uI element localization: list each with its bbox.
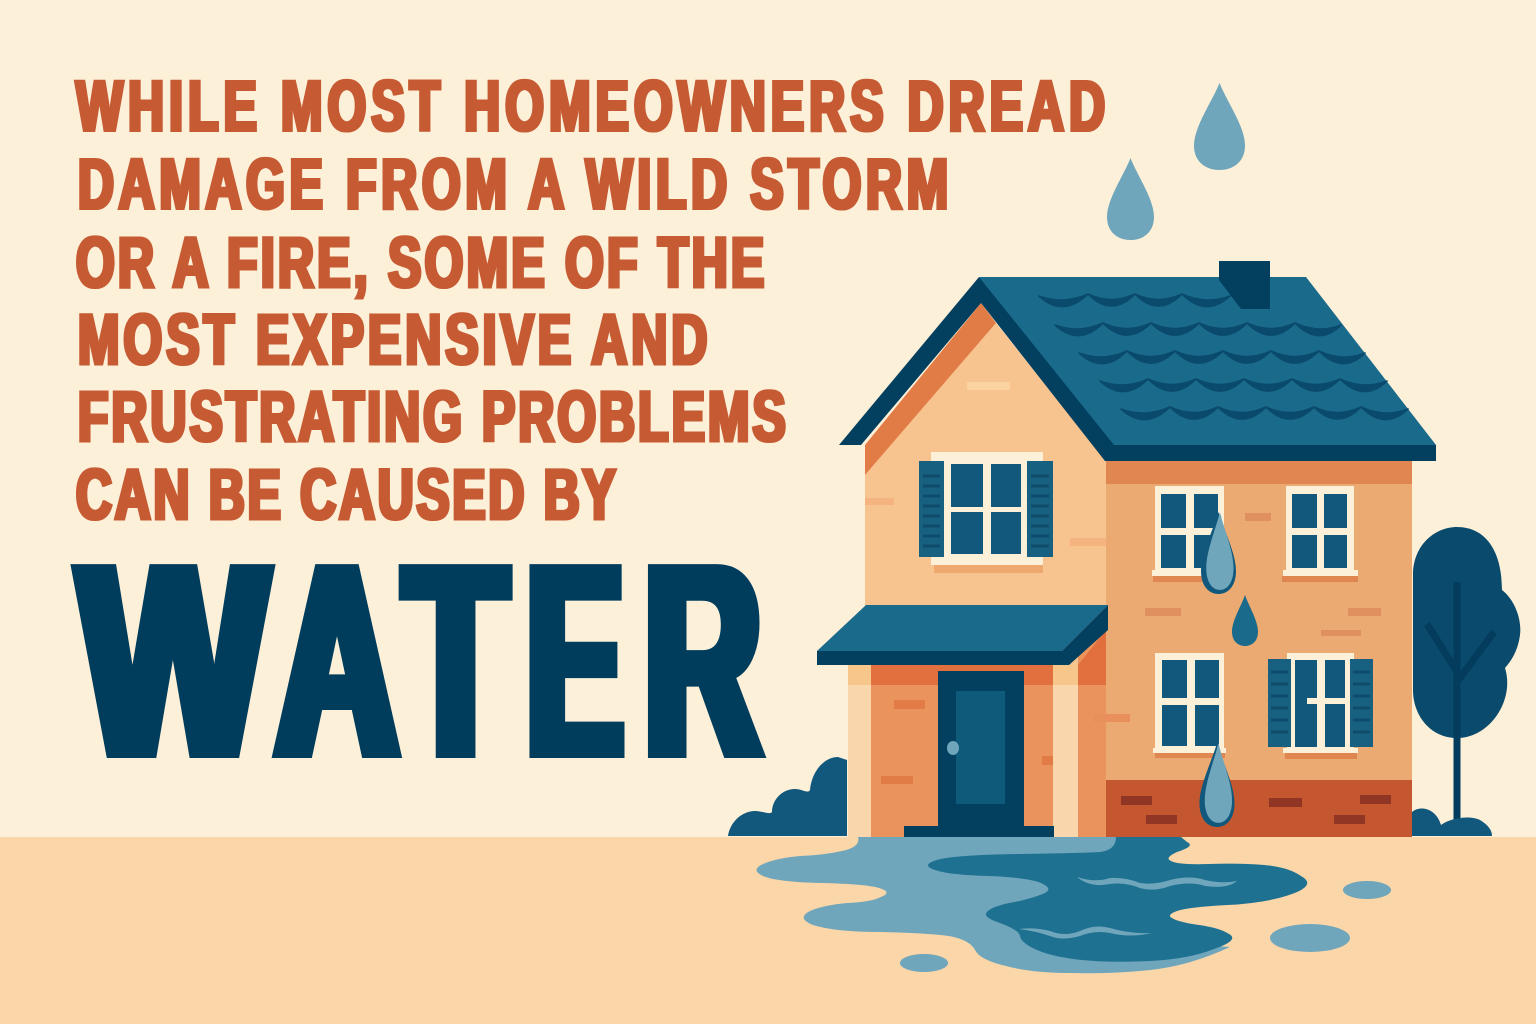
house bbox=[817, 261, 1436, 837]
roof gable orange trim bbox=[865, 303, 996, 475]
heading text: WHILE MOST HOMEOWNERS DREAD bbox=[76, 67, 1105, 146]
heading text: MOST EXPENSIVE AND bbox=[78, 300, 707, 379]
tree bbox=[1413, 527, 1520, 822]
puddle bbox=[756, 837, 1391, 973]
heading text: FRUSTRATING PROBLEMS bbox=[78, 377, 786, 456]
bush: left bbox=[728, 757, 847, 836]
heading text: CAN BE CAUSED BY bbox=[76, 455, 616, 534]
headline word: WATER: W bbox=[79, 508, 269, 813]
icon: drip on upper window bbox=[1201, 512, 1236, 594]
porch side wall bbox=[1078, 630, 1106, 837]
porch roof bbox=[817, 605, 1108, 651]
right wall bbox=[1106, 461, 1412, 837]
ground bbox=[0, 837, 1536, 1024]
headline word: WATER: E bbox=[528, 508, 622, 813]
headline word: WATER: R bbox=[645, 508, 760, 813]
roof main bbox=[979, 277, 1436, 461]
door bbox=[938, 671, 1024, 826]
upper window right bbox=[1282, 486, 1358, 582]
brick base bbox=[1106, 780, 1412, 837]
upper wall band bbox=[1106, 461, 1412, 484]
heading text: OR A FIRE, SOME OF THE bbox=[76, 223, 764, 302]
gable window bbox=[919, 452, 1053, 573]
heading text: DAMAGE FROM A WILD STORM bbox=[78, 145, 948, 224]
porch bricks bbox=[881, 700, 1130, 784]
door knob bbox=[947, 741, 959, 755]
porch columns bbox=[848, 665, 871, 837]
chimney bbox=[1219, 261, 1270, 309]
roof shingles bbox=[1039, 294, 1408, 420]
headline word: WATER: T bbox=[405, 508, 507, 813]
headline word: WATER bbox=[79, 508, 760, 813]
puddle light water bbox=[756, 837, 1230, 973]
heading text bbox=[76, 67, 1105, 534]
roof barge board bbox=[839, 277, 1436, 461]
lower window left bbox=[1153, 653, 1226, 758]
icon: falling drop left bbox=[1107, 158, 1154, 240]
icon: drip on brick base bbox=[1200, 743, 1234, 827]
icon: small drip on wall bbox=[1232, 595, 1258, 646]
puddle ripples bbox=[1019, 877, 1237, 938]
lower window right bbox=[1268, 653, 1373, 759]
door step bbox=[904, 826, 1054, 837]
icon: falling drop right bbox=[1194, 83, 1245, 170]
puddle dark water bbox=[928, 837, 1307, 962]
porch wall bbox=[871, 665, 1053, 837]
headline word: WATER: A bbox=[276, 508, 398, 813]
porch bbox=[817, 605, 1130, 837]
shutters bbox=[1268, 659, 1373, 747]
puddle splash drops bbox=[900, 881, 1391, 972]
wall bricks bbox=[865, 382, 1391, 824]
bush: right bbox=[1412, 808, 1492, 836]
upper window left bbox=[1152, 486, 1230, 582]
shutters bbox=[919, 461, 1053, 557]
gable wall bbox=[865, 323, 1106, 837]
